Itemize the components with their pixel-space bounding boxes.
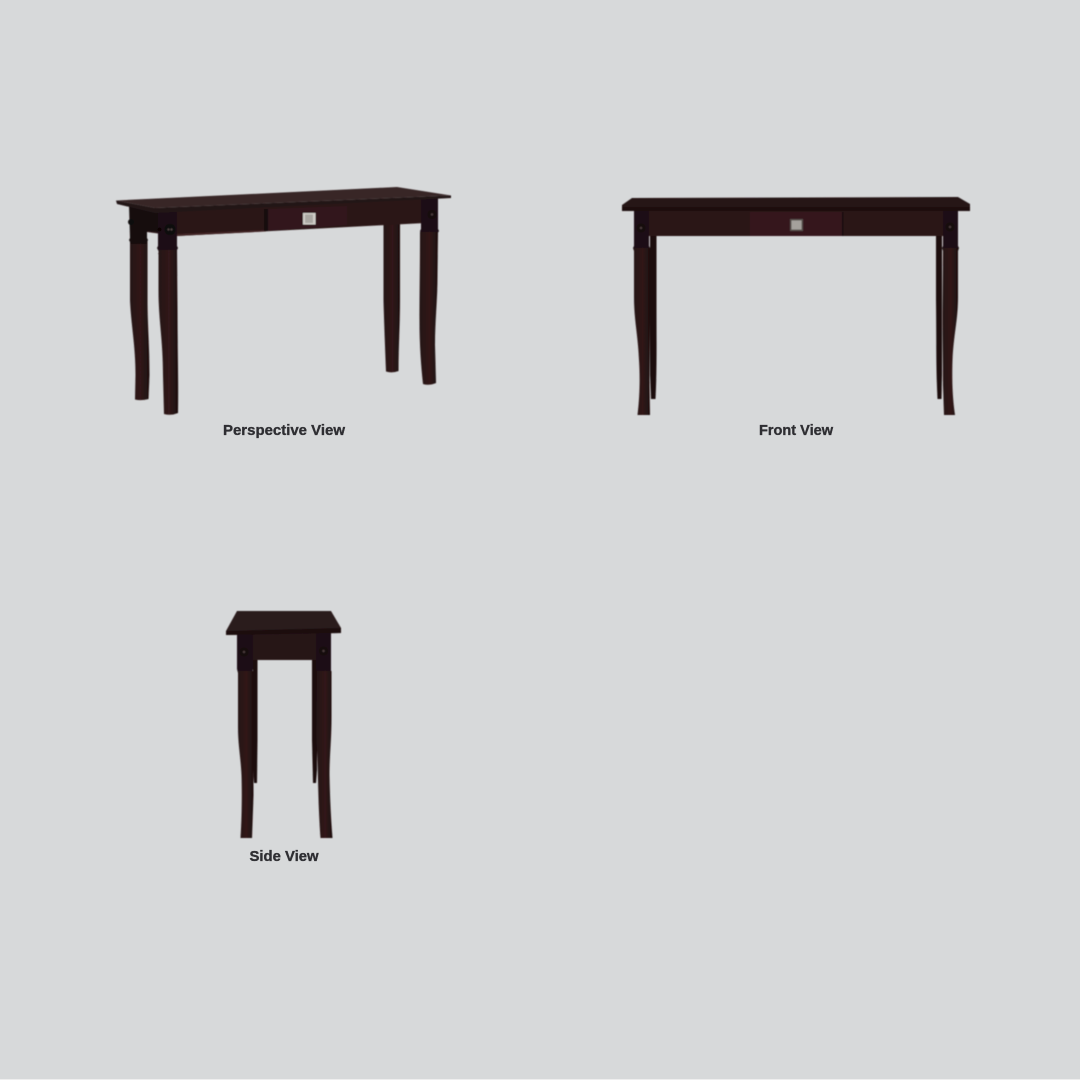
drawer bbox=[750, 212, 844, 236]
table: perspective view bbox=[116, 187, 451, 415]
apron bbox=[147, 197, 425, 236]
right leg bbox=[942, 209, 959, 251]
apron bbox=[237, 630, 331, 660]
panel: perspective view bbox=[116, 187, 451, 439]
right leg bbox=[316, 630, 331, 673]
left leg bbox=[237, 630, 253, 673]
back left leg bbox=[130, 240, 150, 400]
back right leg bbox=[384, 222, 400, 372]
panel: front view bbox=[622, 197, 970, 439]
back legs bbox=[650, 235, 657, 399]
label: perspective view: Perspective View bbox=[223, 422, 345, 439]
drawer bbox=[264, 206, 347, 231]
label: front view: Front View bbox=[759, 422, 833, 439]
back legs bbox=[253, 658, 258, 783]
drawer handle bbox=[303, 213, 316, 224]
apron bbox=[634, 209, 958, 236]
tabletop bbox=[622, 197, 970, 211]
front left leg bbox=[157, 212, 178, 254]
table: front view bbox=[622, 197, 970, 415]
label: side view: Side View bbox=[250, 848, 319, 865]
drawer handle bbox=[790, 219, 803, 231]
front right leg bbox=[420, 197, 439, 234]
table: side view bbox=[226, 611, 341, 838]
tabletop bbox=[116, 187, 451, 208]
panel: side view bbox=[226, 611, 341, 865]
tabletop bbox=[226, 611, 341, 635]
left leg bbox=[633, 209, 650, 251]
